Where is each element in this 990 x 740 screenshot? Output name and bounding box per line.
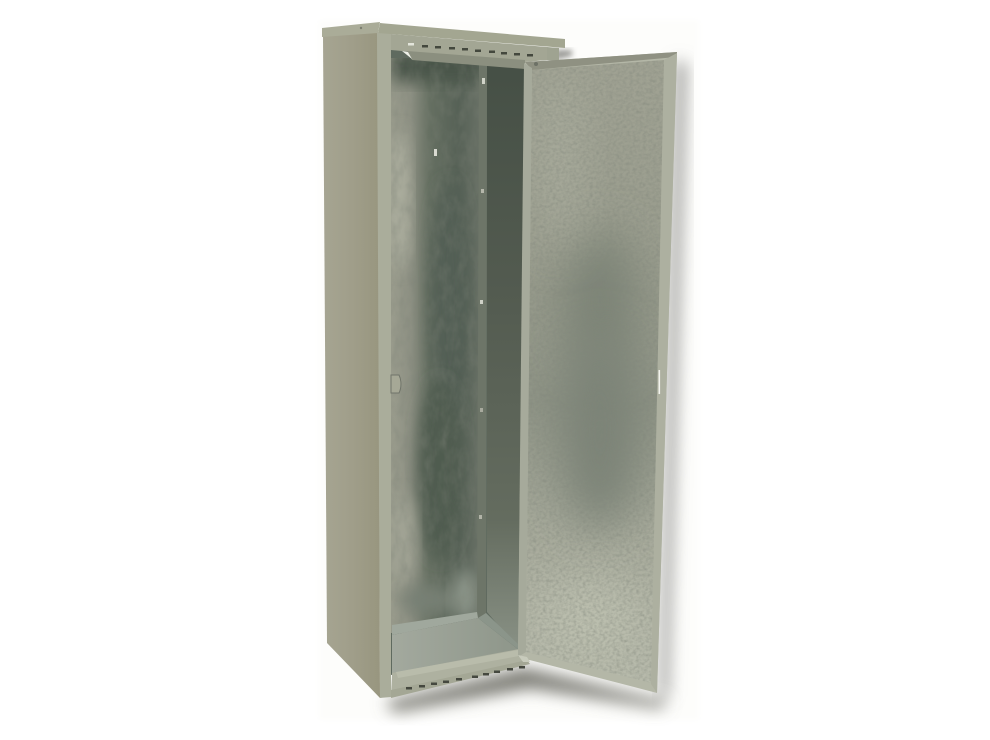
shadow: cabinet and door xyxy=(385,50,686,712)
door xyxy=(518,52,677,695)
top rail with slots xyxy=(391,34,559,69)
roof xyxy=(322,22,565,48)
bottom rail with slots xyxy=(391,649,530,698)
front frame left xyxy=(377,33,391,698)
illustration: open metal cabinet xyxy=(322,22,694,722)
interior back wall xyxy=(390,50,525,675)
back wall mottling xyxy=(390,50,481,633)
interior right wall xyxy=(487,55,525,650)
floor of cabinet xyxy=(392,612,519,676)
vertical rib xyxy=(477,65,487,620)
side knockout xyxy=(391,375,401,393)
cabinet side panel xyxy=(323,32,380,698)
door mottling xyxy=(526,61,664,682)
